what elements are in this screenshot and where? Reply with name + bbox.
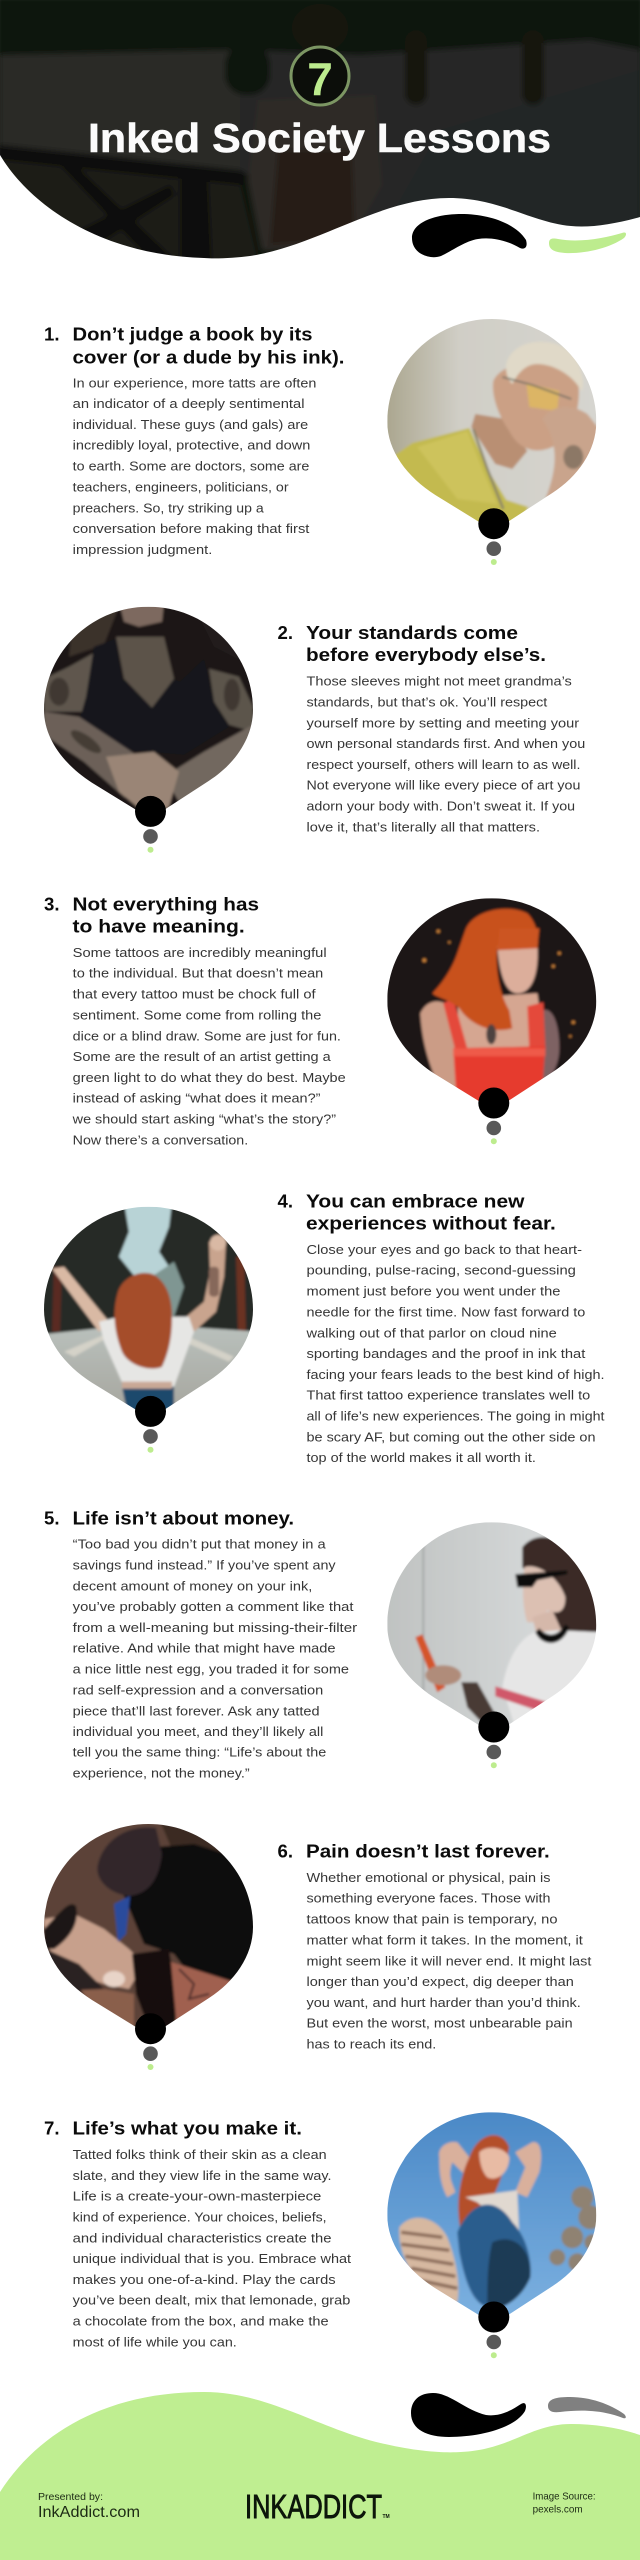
- lesson 3 heading: Not everything has: [72, 894, 259, 915]
- lesson 4 body text: walking out of that parlor on cloud nine: [305, 1325, 557, 1340]
- lesson 6 body text: tattoos know that pain is temporary, no: [306, 1912, 558, 1927]
- lesson 4 body text: top of the world makes it all worth it.: [306, 1450, 536, 1465]
- lesson 2 heading: Your standards come: [306, 622, 518, 643]
- lesson 4 body text: needle for the first time. Now fast forward to: [306, 1304, 585, 1319]
- lesson 7 body text: kind of experience. Your choices, beliefs,: [73, 2209, 327, 2224]
- lesson 7 body text: [73, 2147, 352, 2349]
- lesson 2 body text: adorn your body with. Don’t sweat it. If you: [306, 799, 575, 814]
- lesson 6 body text: [306, 1870, 592, 2051]
- InkAddict logo: TM: [382, 2514, 390, 2520]
- lesson 6 body text: Whether emotional or physical, pain is: [306, 1870, 551, 1885]
- lesson 7 body text: slate, and they view life in the same way.: [73, 2168, 331, 2183]
- lesson 1 body text: an indicator of a deeply sentimental: [73, 396, 305, 411]
- number badge: 7: [291, 47, 349, 105]
- image source credit: Image Source:: [533, 2490, 596, 2502]
- lesson 3 body text: to the individual. But that doesn’t mean: [73, 966, 323, 981]
- lesson 1 body text: incredibly loyal, protective, and down: [73, 438, 310, 453]
- lesson 2 body text: Not everyone will like every piece of art you: [306, 778, 580, 793]
- lesson 3 body text: [72, 945, 346, 1147]
- lesson 1 body text: conversation before making that first: [73, 521, 310, 536]
- lesson 2 body text: standards, but that’s ok. You’ll respect: [306, 694, 548, 709]
- footer green wave: [0, 2392, 640, 2560]
- presented by credit: [38, 2491, 140, 2521]
- lesson 3 body text: Some tattoos are incredibly meaningful: [73, 945, 327, 960]
- lesson 4 body text: sporting bandages and the proof in ink that: [306, 1346, 586, 1361]
- lesson 3 bullet dots: [478, 1088, 509, 1144]
- lesson 2 heading: [278, 622, 546, 665]
- number badge: 7: 7: [307, 53, 333, 105]
- lesson 5 body text: tell you the same thing: “Life’s about the: [73, 1745, 326, 1760]
- lesson 3 body text: green light to do what they do best. Maybe: [73, 1070, 346, 1085]
- presented by credit: Presented by:: [38, 2491, 103, 2503]
- lesson 1 body text: teachers, engineers, politicians, or: [73, 479, 289, 494]
- lesson 1 bullet dots: [478, 508, 509, 565]
- lesson 4 heading: [278, 1190, 556, 1233]
- lesson 5 body text: you’ve probably gotten a comment like that: [73, 1599, 354, 1614]
- lesson 1 heading: Don’t judge a book by its: [72, 324, 312, 345]
- lesson 3 body text: instead of asking “what does it mean?”: [73, 1091, 320, 1106]
- lesson 3: [44, 893, 602, 1147]
- lesson 4 body text: Close your eyes and go back to that heart-: [306, 1242, 582, 1257]
- lesson 2 heading: before everybody else’s.: [306, 644, 546, 665]
- InkAddict logo: INKADDICT: [245, 2488, 382, 2525]
- lesson 2 photo: tattooed man in black tank top: [39, 602, 259, 853]
- lesson 3 heading: [44, 894, 259, 937]
- lesson 4 body text: all of life’s new experiences. The going in might: [306, 1409, 605, 1424]
- lesson 2 body text: [306, 674, 585, 834]
- lesson 3 body text: dice or a blind draw. Some are just for fun.: [73, 1028, 341, 1043]
- lesson 1 heading: cover (or a dude by his ink).: [72, 346, 344, 367]
- lesson 4 photo: woman on road with raised arms: [39, 1202, 259, 1453]
- lesson 7 body text: Life is a create-your-own-masterpiece: [73, 2189, 321, 2204]
- lesson 2 body text: love it, that’s literally all that matters.: [306, 819, 540, 834]
- lesson 1 body text: [73, 375, 316, 557]
- lesson 5 body text: rad self-expression and a conversation: [73, 1682, 323, 1697]
- lesson 5 photo: woman in sunglasses with orange phone: [382, 1517, 602, 1768]
- lesson 1 body text: to earth. Some are doctors, some are: [73, 459, 309, 474]
- lesson 4 body text: be scary AF, but coming out the other side on: [306, 1429, 596, 1444]
- lesson 3 heading: to have meaning.: [72, 916, 245, 937]
- lesson 1 body text: individual. These guys (and gals) are: [73, 417, 308, 432]
- lesson 3 body text: that every tattoo must be chock full of: [73, 987, 316, 1002]
- lesson 6 body text: has to reach its end.: [306, 2036, 436, 2051]
- lesson 5 body text: piece that’ll last forever. Ask any tatted: [73, 1703, 320, 1718]
- lesson 3 body text: sentiment. Some come from rolling the: [73, 1007, 321, 1022]
- lesson 4 body text: moment just before you went under the: [306, 1284, 560, 1299]
- lesson 6 body text: might seem like it will never end. It might last: [306, 1953, 592, 1968]
- image source credit: pexels.com: [533, 2504, 583, 2516]
- lesson 2 body text: respect yourself, others will learn to as well.: [306, 757, 580, 772]
- lesson 5 body text: “Too bad you didn’t put that money in a: [73, 1537, 327, 1552]
- lesson 6 heading: Pain doesn’t last forever.: [306, 1840, 550, 1861]
- lesson 3 heading: 3.: [44, 894, 60, 915]
- lesson 7 body text: a chocolate from the box, and make the: [73, 2314, 329, 2329]
- lesson 1 body text: preachers. So, try striking up a: [73, 500, 265, 515]
- lesson 1 heading: [44, 324, 344, 367]
- lesson 4 heading: 4.: [278, 1190, 293, 1211]
- lesson 4 body text: facing your fears leads to the best kind of high.: [306, 1367, 604, 1382]
- lesson 5 body text: decent amount of money on your ink,: [73, 1578, 312, 1593]
- lesson 1 body text: impression judgment.: [73, 542, 212, 557]
- lesson 6 body text: something everyone faces. Those with: [306, 1891, 550, 1906]
- lesson 3 body text: Now there’s a conversation.: [73, 1132, 248, 1147]
- lesson 1: [44, 314, 602, 565]
- lesson 5 heading: Life isn’t about money.: [72, 1507, 294, 1528]
- lesson 1 heading: 1.: [44, 324, 60, 345]
- lesson 4 heading: You can embrace new: [306, 1190, 525, 1211]
- lesson 6: [39, 1819, 592, 2070]
- lesson 2 heading: 2.: [278, 622, 293, 643]
- lesson 6 body text: But even the worst, most unbearable pain: [306, 2016, 573, 2031]
- lesson 5 body text: experience, not the money.”: [73, 1765, 250, 1780]
- lesson 5 body text: [73, 1537, 358, 1780]
- lesson 6 body text: longer than you’d expect, dig deeper than: [306, 1974, 574, 1989]
- lesson 2: [39, 602, 585, 853]
- lesson 5 bullet dots: [478, 1712, 509, 1768]
- lesson 6 body text: matter what form it takes. In the moment, it: [306, 1932, 583, 1947]
- image source credit: [533, 2490, 596, 2516]
- lesson 6 body text: you want, and hurt harder than you’d think.: [306, 1995, 581, 2010]
- lesson 7 heading: 7.: [44, 2118, 60, 2139]
- black brush blob, footer: [411, 2393, 526, 2437]
- lesson 3 photo: red-haired woman in red dress: [382, 893, 602, 1144]
- presented by credit: InkAddict.com: [38, 2504, 140, 2521]
- lesson 5 body text: individual you meet, and they’ll likely all: [73, 1724, 323, 1739]
- black brush blob, header: [412, 214, 527, 257]
- lesson 5 heading: 5.: [44, 1507, 60, 1528]
- lesson 5 body text: from a well-meaning but missing-their-filter: [73, 1620, 358, 1635]
- lesson 2 body text: own personal standards first. And when you: [306, 736, 585, 751]
- lesson 2 body text: yourself more by setting and meeting your: [306, 715, 580, 730]
- lesson 4 body text: pounding, pulse-racing, second-guessing: [306, 1263, 576, 1278]
- lesson 5 body text: savings fund instead.” If you’ve spent any: [73, 1558, 336, 1573]
- lesson 2 body text: Those sleeves might not meet grandma’s: [306, 674, 572, 689]
- lesson 6 heading: 6.: [278, 1840, 293, 1861]
- lesson 7 bullet dots: [478, 2302, 509, 2358]
- lesson 6 bullet dots: [135, 2013, 166, 2070]
- lesson 3 body text: Some are the result of an artist getting a: [73, 1049, 332, 1064]
- lesson 7 body text: most of life while you can.: [73, 2334, 237, 2349]
- lesson 4 heading: experiences without fear.: [306, 1212, 556, 1233]
- lesson 1 body text: In our experience, more tatts are often: [73, 375, 316, 390]
- lesson 7 body text: unique individual that is you. Embrace what: [73, 2251, 352, 2266]
- lesson 3 body text: we should start asking “what’s the story?”: [72, 1112, 336, 1127]
- lesson 7: [44, 2107, 602, 2358]
- lesson 7 body text: makes you one-of-a-kind. Play the cards: [73, 2272, 336, 2287]
- lesson 7 body text: Tatted folks think of their skin as a clean: [73, 2147, 327, 2162]
- lesson 7 photo: laughing woman in jeans under blue sky: [382, 2107, 602, 2358]
- lesson 4 body text: That first tattoo experience translates well to: [306, 1388, 590, 1403]
- lesson 5: [44, 1507, 602, 1780]
- lesson 2 bullet dots: [135, 796, 166, 853]
- gray brush stroke, footer: [548, 2397, 626, 2418]
- lesson 7 heading: Life’s what you make it.: [72, 2118, 302, 2139]
- lesson 7 body text: and individual characteristics create the: [73, 2230, 331, 2245]
- green brush stroke, header: [549, 232, 626, 253]
- lesson 4: [39, 1190, 605, 1465]
- lesson 5 body text: a nice little nest egg, you traded it for some: [73, 1662, 349, 1677]
- lesson 5 body text: relative. And while that might have made: [73, 1641, 336, 1656]
- lesson 4 bullet dots: [135, 1396, 166, 1453]
- lesson 1 photo: blond man in yellow shirt: [382, 314, 602, 565]
- header photo banner: [0, 0, 640, 270]
- lesson 7 body text: you’ve been dealt, mix that lemonade, grab: [73, 2293, 350, 2308]
- lesson 6 photo: gloved tattoo artist at work: [39, 1819, 259, 2070]
- title: Inked Society Lessons: [88, 115, 551, 161]
- lesson 4 body text: [305, 1242, 605, 1465]
